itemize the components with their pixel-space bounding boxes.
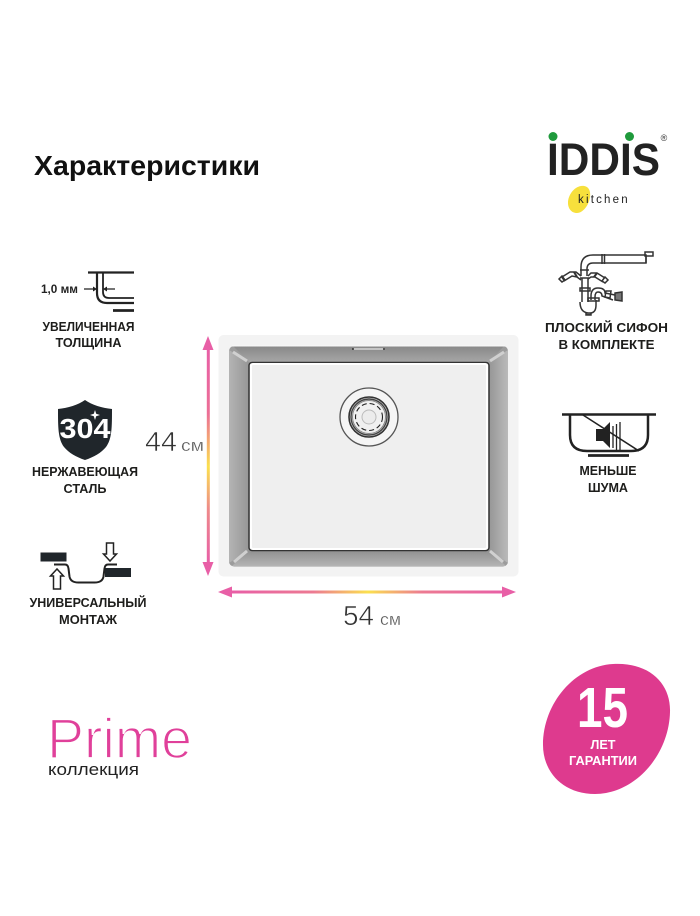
height dimension arrow bbox=[202, 336, 214, 576]
sink top view bbox=[218, 335, 518, 576]
height label: 44 bbox=[145, 426, 177, 457]
badge blob bbox=[543, 664, 670, 794]
logo registered mark: ® bbox=[661, 133, 668, 143]
width label bbox=[343, 600, 401, 631]
logo kitchen word: kitchen bbox=[578, 194, 630, 206]
label: universal mounting bbox=[30, 595, 146, 627]
thickness arrows bbox=[84, 288, 115, 290]
logo: IDDIS kitchen bbox=[547, 132, 668, 213]
collection name: Prime bbox=[47, 707, 192, 771]
strike line bbox=[583, 415, 639, 451]
width label: см bbox=[380, 610, 401, 629]
logo yellow blob bbox=[568, 186, 590, 213]
overflow slot bbox=[352, 348, 385, 350]
label: flat siphon bbox=[545, 320, 668, 352]
collection caption: коллекция bbox=[48, 760, 139, 779]
thickness value: 1,0 мм bbox=[41, 282, 78, 296]
icon: 304 steel shield bbox=[58, 400, 112, 460]
icon: metal thickness bbox=[41, 272, 134, 310]
icon: flat siphon bbox=[559, 252, 653, 315]
sink rim bbox=[218, 335, 518, 576]
icon: less noise sink bbox=[562, 414, 656, 456]
badge caption: ЛЕТ bbox=[590, 737, 616, 752]
title: Характеристики bbox=[34, 150, 260, 181]
label: increased thickness: ТОЛЩИНА bbox=[56, 335, 122, 350]
label: stainless steel: НЕРЖАВЕЮЩАЯ bbox=[32, 464, 138, 479]
basin corner highlights bbox=[233, 352, 504, 562]
label: less noise: МЕНЬШЕ bbox=[580, 463, 637, 478]
down arrow bbox=[104, 543, 116, 561]
drain bbox=[340, 388, 398, 446]
label: less noise bbox=[580, 463, 637, 495]
width dimension arrow bbox=[218, 586, 516, 598]
logo green dots bbox=[548, 132, 634, 141]
sound lines bbox=[613, 422, 620, 450]
shield sparkle bbox=[90, 410, 100, 420]
height label bbox=[145, 426, 204, 457]
badge caption bbox=[569, 737, 637, 768]
height label: см bbox=[181, 436, 204, 455]
label: flat siphon: ПЛОСКИЙ СИФОН bbox=[545, 320, 668, 335]
sink basin walls bbox=[229, 346, 508, 566]
up arrow bbox=[50, 569, 64, 589]
icon: universal mounting bbox=[40, 543, 131, 589]
label: stainless steel bbox=[32, 464, 138, 496]
label: less noise: ШУМА bbox=[588, 480, 629, 495]
label: increased thickness: УВЕЛИЧЕННАЯ bbox=[42, 319, 134, 334]
label: stainless steel: СТАЛЬ bbox=[64, 481, 106, 496]
rim top highlight bbox=[232, 345, 505, 347]
badge number: 15 bbox=[577, 676, 628, 740]
label: universal mounting: УНИВЕРСАЛЬНЫЙ bbox=[30, 595, 146, 610]
siphon side hoses bbox=[562, 272, 581, 281]
speaker bbox=[596, 422, 610, 448]
label: flat siphon: В КОМПЛЕКТЕ bbox=[558, 337, 655, 352]
logo wordmark: IDDIS bbox=[547, 134, 660, 185]
width label: 54 bbox=[343, 600, 374, 631]
label: universal mounting: МОНТАЖ bbox=[59, 612, 117, 627]
badge caption: ГАРАНТИИ bbox=[569, 753, 637, 768]
sink floor bbox=[249, 362, 489, 550]
warranty badge bbox=[543, 664, 670, 794]
label: increased thickness bbox=[42, 319, 134, 350]
shield number: 304 bbox=[60, 413, 111, 444]
